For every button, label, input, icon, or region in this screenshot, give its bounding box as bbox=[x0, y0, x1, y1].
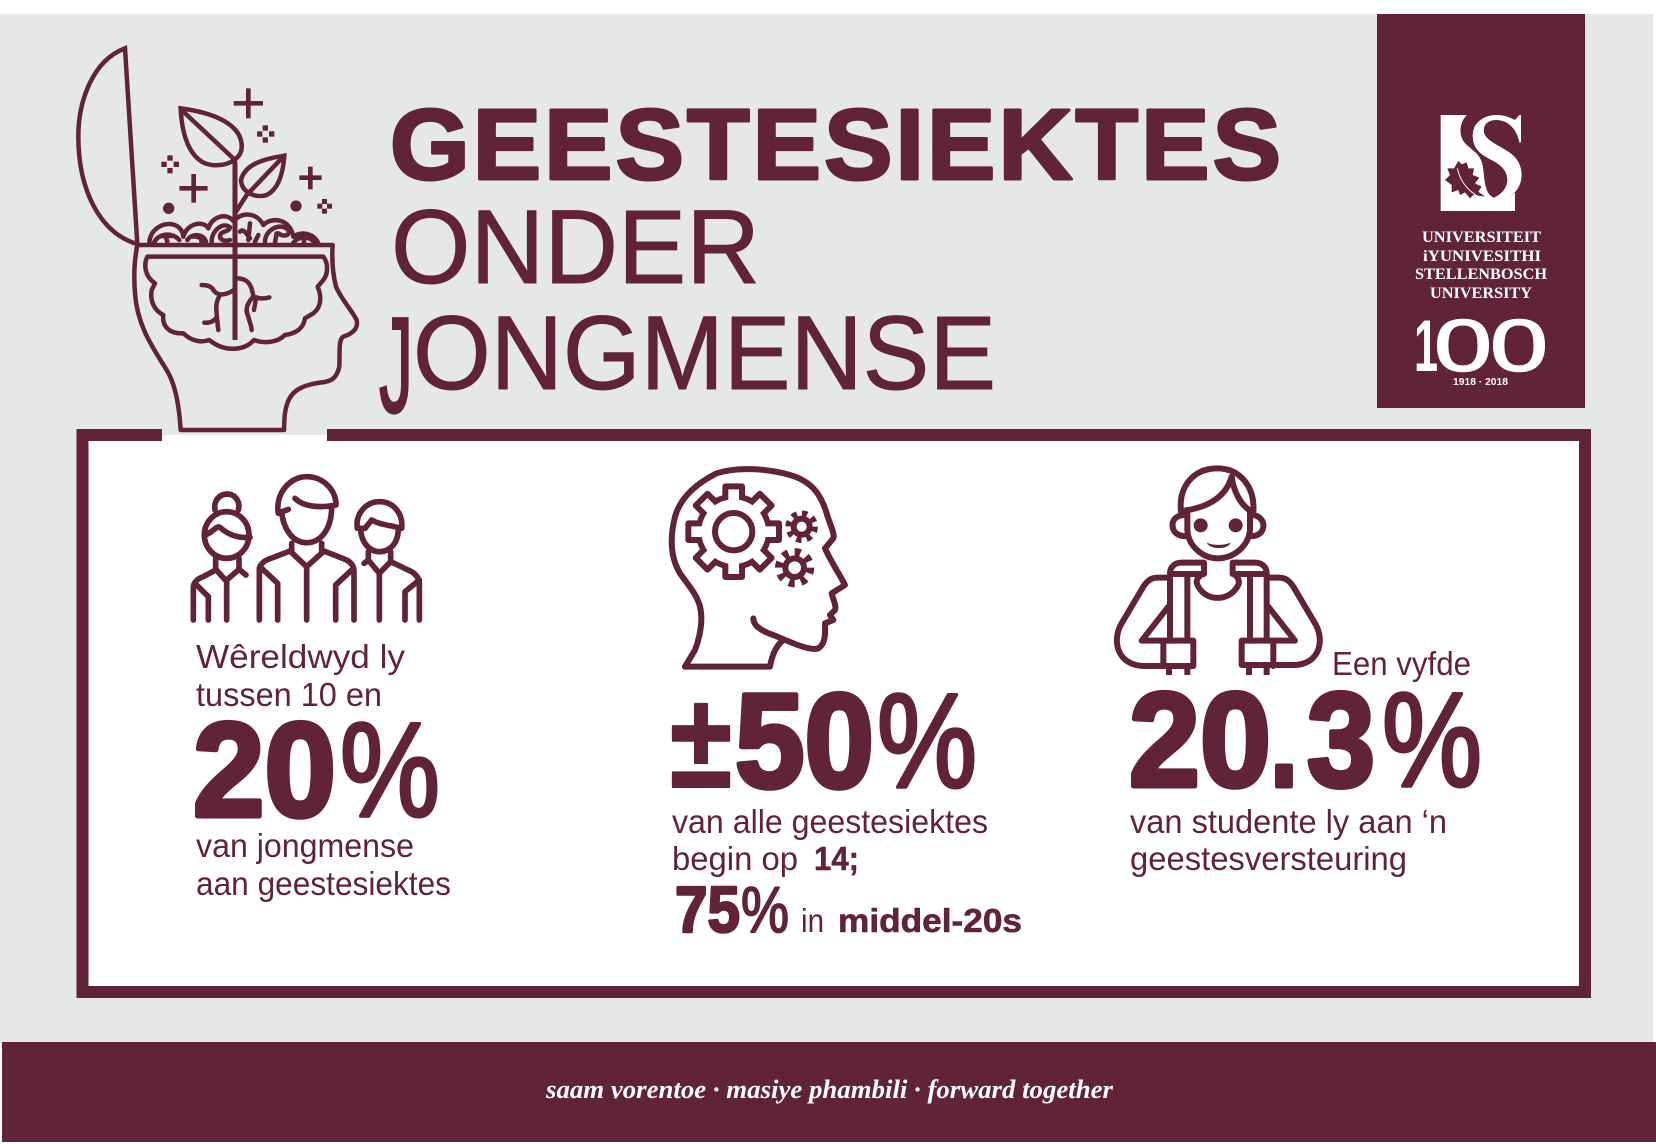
icon: student with backpack bbox=[1117, 468, 1320, 675]
heading: main title: J bbox=[379, 289, 413, 441]
heading: main title: ONDER bbox=[391, 189, 760, 306]
text: university name: STELLENBOSCH bbox=[1415, 266, 1547, 283]
icon: SU crest bbox=[1441, 114, 1522, 211]
text: university name: iYUNIVESITHI bbox=[1423, 248, 1541, 265]
text: motto: saam vorentoe · masiye phambili · forward together bbox=[545, 1075, 1114, 1104]
panel: white statistics box bbox=[76, 429, 1591, 998]
text block: column 3: 3 bbox=[1307, 666, 1375, 815]
text block: column 3: van studente ly aan ‘n bbox=[1130, 803, 1447, 840]
heading: main title bbox=[379, 89, 1284, 441]
text block: column 1: % bbox=[340, 696, 440, 845]
text: 100 years: 0 bbox=[1434, 306, 1492, 387]
text block: column 2: 75 bbox=[675, 873, 740, 946]
text block: column 2: 14; bbox=[814, 840, 859, 877]
text: 100 years: 0 bbox=[1490, 306, 1548, 387]
text block: column 3: % bbox=[1382, 666, 1482, 815]
text: university name: UNIVERSITEIT bbox=[1422, 229, 1542, 246]
text block: column 3: geestesversteuring bbox=[1130, 840, 1407, 877]
text block: column 3 bbox=[1129, 645, 1482, 877]
text block: column 2: 50 bbox=[735, 667, 874, 816]
text: university name bbox=[1415, 229, 1547, 302]
text block: column 1: tussen 10 en bbox=[196, 676, 382, 713]
text block: column 2: middel-20s bbox=[838, 902, 1022, 939]
footer band bbox=[2, 1042, 1656, 1142]
text block: column 3: . bbox=[1270, 666, 1298, 815]
text block: column 2: begin op bbox=[672, 840, 798, 877]
text block: column 2: in bbox=[801, 902, 824, 939]
text block: column 2: ± bbox=[670, 667, 732, 816]
text: university name: UNIVERSITY bbox=[1430, 285, 1532, 302]
text: 100 years: 1918 · 2018 bbox=[1453, 377, 1508, 388]
text block: column 1 bbox=[193, 638, 451, 902]
text block: column 2: % bbox=[877, 667, 977, 816]
text block: column 1: 20 bbox=[193, 696, 336, 845]
text block: column 1: aan geestesiektes bbox=[196, 865, 451, 902]
text block: column 2: van alle geestesiektes bbox=[672, 803, 988, 840]
text block: column 1: Wêreldwyd ly bbox=[196, 638, 406, 675]
text block: column 2: % bbox=[741, 873, 789, 946]
text block: column 3: 20 bbox=[1129, 666, 1271, 815]
heading: main title: GEESTESIEKTES bbox=[390, 89, 1284, 201]
text block: column 3: Een vyfde bbox=[1332, 645, 1471, 682]
icon: open head with plant growing from brain bbox=[78, 48, 357, 430]
text block: column 1: van jongmense bbox=[196, 827, 414, 864]
icon: three people bbox=[193, 477, 419, 620]
text block: column 2 bbox=[670, 667, 1022, 946]
text: 100 years bbox=[1414, 306, 1548, 388]
icon: head with gears bbox=[672, 469, 845, 667]
heading: main title: ONGMENSE bbox=[413, 295, 996, 412]
panel: university logo bbox=[1377, 14, 1585, 408]
text: 100 years: 1 bbox=[1414, 306, 1438, 387]
